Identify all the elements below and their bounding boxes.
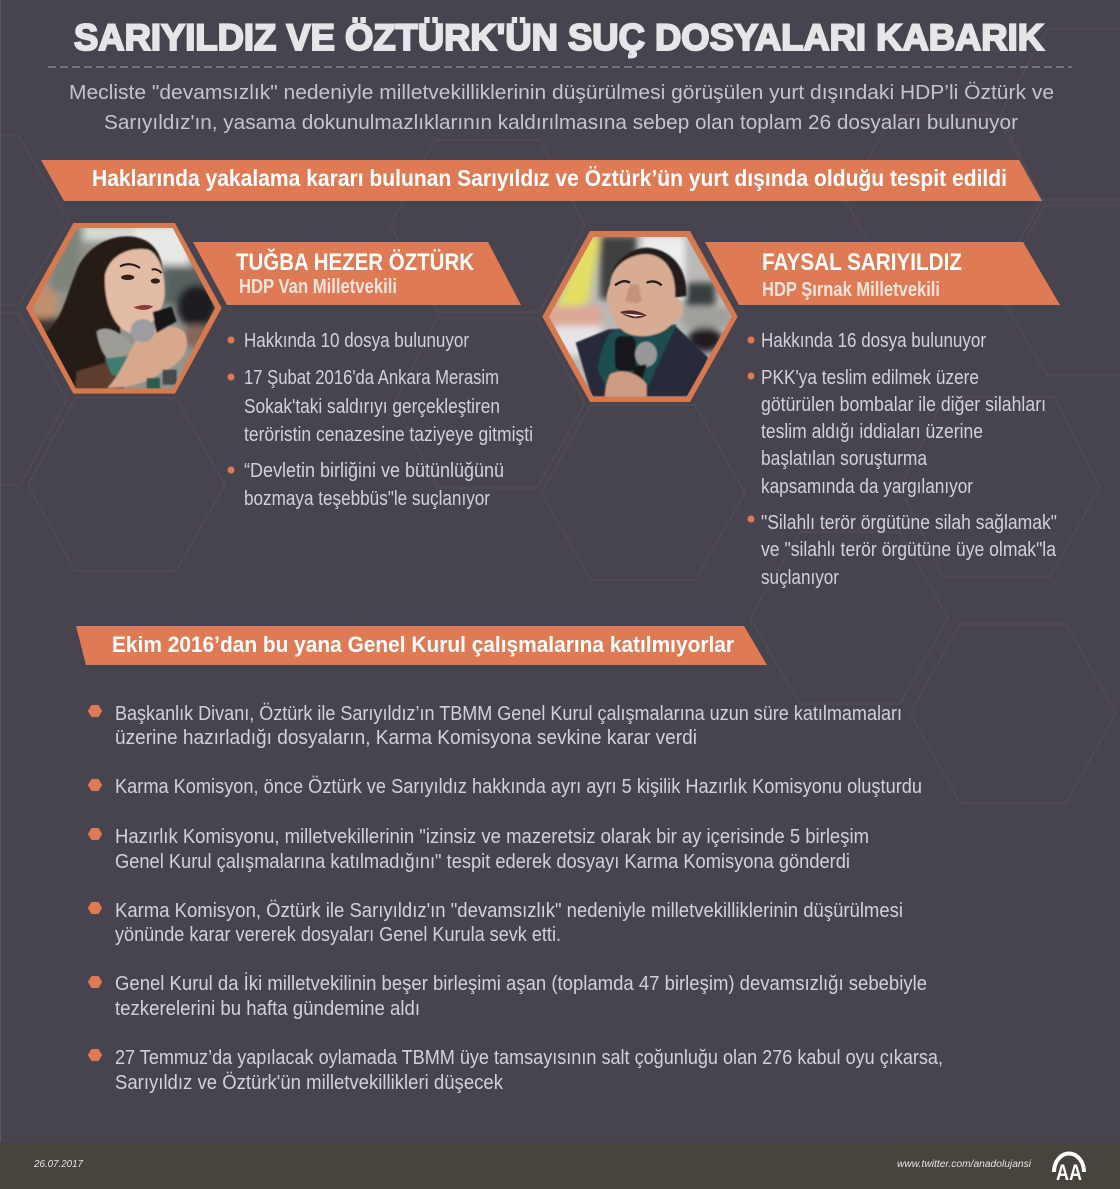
list: Faysal Sarıyıldız facts: kapsamında da yargılanıyor [761,476,973,498]
list: process steps: tezkerelerini bu hafta gündemine aldı [115,998,420,1020]
list: Faysal Sarıyıldız facts: başlatılan soruşturma [761,448,928,470]
footer: 26.07.2017 [33,1159,83,1170]
list: Tuğba Hezer Öztürk facts: teröristin cenazesine taziyeye gitmişti [244,424,533,446]
list: Tuğba Hezer Öztürk facts [228,330,533,510]
name banner: Faysal Sarıyıldız: FAYSAL SARIYILDIZ [762,249,962,276]
list: process steps: Genel Kurul çalışmalarına katılmadığını" tespit ederek dosyayı Karma Komisyona gönderdi [115,851,850,873]
intro text: Mecliste "devamsızlık" nedeniyle milletvekilliklerinin düşürülmesi görüşülen yurt dışındaki HDP’li Öztürk ve [69,81,1054,104]
list: process steps: yönünde karar vererek dosyaları Genel Kurula sevk etti. [115,924,561,946]
list: process steps: Karma Komisyon, Öztürk ile Sarıyıldız'ın "devamsızlık" nedeniyle milletvekilliklerinin düşürülmesi [115,900,903,922]
photo: Tuğba Hezer Öztürk [26,223,222,394]
list: process steps: Genel Kurul da İki milletvekilinin beşer birleşimi aşan (toplamda 47 birleşim) devamsızlığı sebebiyle [115,972,927,995]
footer: www.twitter.com/anadolujansi [897,1159,1032,1170]
list: Tuğba Hezer Öztürk facts: bozmaya teşebbüs"le suçlanıyor [244,488,490,510]
banner: general assembly heading: Ekim 2016’dan bu yana Genel Kurul çalışmalarına katılmıyorlar [112,632,734,657]
photo: Faysal Sarıyıldız [542,231,738,402]
list: Faysal Sarıyıldız facts: PKK'ya teslim edilmek üzere [761,367,979,389]
list: Faysal Sarıyıldız facts: suçlanıyor [761,567,839,589]
list: Faysal Sarıyıldız facts: ve "silahlı terör örgütüne üye olmak"la [761,539,1057,561]
banner: arrest warrant heading [41,160,1042,201]
list: Faysal Sarıyıldız facts: "Silahlı terör örgütüne silah sağlamak" [761,512,1057,534]
list: process steps [89,703,943,1094]
list: process steps: Karma Komisyon, önce Öztürk ve Sarıyıldız hakkında ayrı ayrı 5 kişilik Hazırlık Komisyonu oluşturdu [115,776,922,798]
name banner: Faysal Sarıyıldız: HDP Şırnak Milletvekili [762,279,940,301]
list: process steps: Hazırlık Komisyonu, milletvekillerinin "izinsiz ve mazeretsiz olarak bir ay içerisinde 5 birleşim [115,826,869,848]
intro text: Sarıyıldız'ın, yasama dokunulmazlıklarının kaldırılmasına sebep olan toplam 26 dosyaları bulunuyor [104,111,1018,134]
name banner: Tuğba Hezer Öztürk: TUĞBA HEZER ÖZTÜRK [236,248,475,276]
banner: arrest warrant heading: Haklarında yakalama kararı bulunan Sarıyıldız ve Öztürk’ün yurt dışında olduğu tespit edildi [92,165,1007,191]
footer [0,1142,1120,1189]
banner: general assembly heading [76,626,767,665]
intro text [69,81,1054,134]
name banner: Tuğba Hezer Öztürk: HDP Van Milletvekili [239,276,397,298]
list: Faysal Sarıyıldız facts: götürülen bombalar ile diğer silahları [761,394,1046,416]
list: process steps: Başkanlık Divanı, Öztürk ile Sarıyıldız’ın TBMM Genel Kurul çalışmalarına uzun süre katılmamaları [115,703,902,725]
icon: AA logo: AA [1056,1160,1082,1185]
list: Faysal Sarıyıldız facts: teslim aldığı iddiaları üzerine [761,421,983,443]
title: SARIYILDIZ VE ÖZTÜRK'ÜN SUÇ DOSYALARI KABARIK [74,17,1044,58]
name banner: Faysal Sarıyıldız [705,242,1060,305]
list: Faysal Sarıyıldız facts [748,330,1057,589]
list: Tuğba Hezer Öztürk facts: Sokak'taki saldırıyı gerçekleştiren [244,396,500,418]
list: Tuğba Hezer Öztürk facts: Hakkında 10 dosya bulunuyor [244,330,469,352]
list: process steps: 27 Temmuz’da yapılacak oylamada TBMM üye tamsayısının salt çoğunluğu olan 276 kabul oyu çıkarsa, [115,1047,943,1069]
list: Faysal Sarıyıldız facts: Hakkında 16 dosya bulunuyor [761,330,986,352]
icon: AA logo [1054,1154,1084,1185]
list: process steps: Sarıyıldız ve Öztürk'ün milletvekillikleri düşecek [115,1072,504,1094]
list: Tuğba Hezer Öztürk facts: 17 Şubat 2016'da Ankara Merasim [244,367,499,389]
name banner: Tuğba Hezer Öztürk [193,242,521,305]
list: Tuğba Hezer Öztürk facts: “Devletin birliğini ve bütünlüğünü [244,460,504,482]
list: process steps: üzerine hazırladığı dosyaların, Karma Komisyona sevkine karar verdi [115,727,697,749]
